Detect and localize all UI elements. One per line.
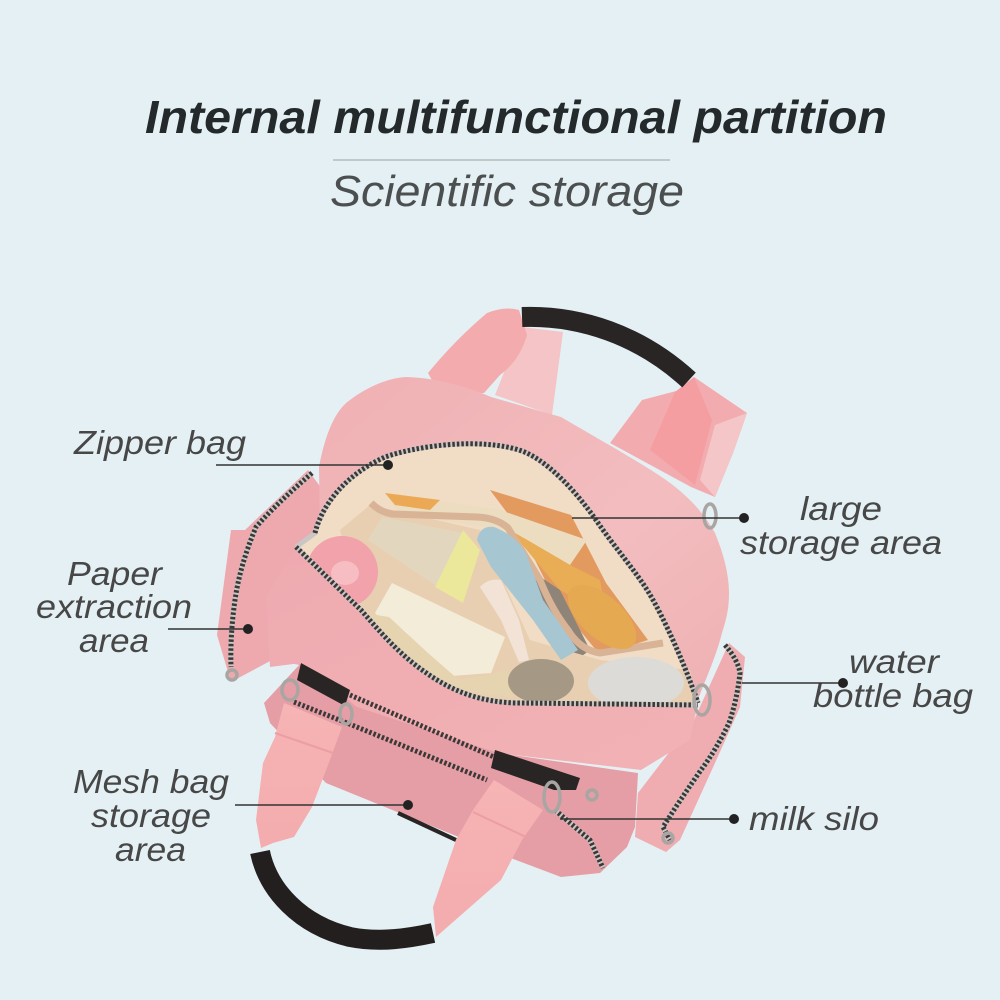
wipes pack bbox=[375, 583, 505, 677]
callout: milk silo bbox=[560, 800, 879, 837]
baby wipes roll bbox=[588, 657, 684, 709]
callout: water bottle bag bbox=[742, 643, 974, 714]
right side pocket bbox=[635, 643, 745, 852]
lower pocket bbox=[264, 663, 638, 877]
callout: milk silo: milk silo bbox=[749, 800, 879, 837]
callout: Paper extraction area bbox=[36, 555, 253, 659]
small white roll bbox=[376, 626, 410, 654]
callout: Mesh bag storage area: Mesh bag bbox=[73, 763, 230, 800]
interior floor bbox=[340, 505, 698, 703]
white spoon bbox=[480, 580, 529, 662]
yellow soap box bbox=[557, 573, 647, 661]
callout: Mesh bag storage area bbox=[73, 763, 413, 868]
back straps bbox=[428, 309, 747, 497]
card bbox=[385, 493, 587, 565]
orange shadow pocket bbox=[490, 490, 648, 655]
callout: Paper extraction area: extraction bbox=[36, 588, 192, 625]
bottom black handle bbox=[260, 852, 433, 940]
baby bottle bbox=[368, 517, 463, 587]
panel: bag interior lining bbox=[296, 444, 698, 703]
callout: Zipper bag bbox=[73, 424, 393, 470]
lid of bag bbox=[319, 377, 729, 710]
callout: large storage area: large bbox=[800, 490, 882, 527]
front zipper bbox=[296, 547, 698, 705]
title: Internal multifunctional partition bbox=[145, 91, 887, 143]
callout: Zipper bag: Zipper bag bbox=[73, 424, 247, 461]
callout: Paper extraction area: area bbox=[79, 622, 149, 659]
black binding and mesh zippers bbox=[294, 663, 603, 868]
bottle cap bbox=[435, 530, 480, 603]
illustration: open pink backpack bbox=[217, 309, 747, 940]
main zipper bbox=[296, 444, 698, 703]
callout: large storage area: storage area bbox=[740, 524, 942, 561]
front body bbox=[266, 547, 698, 770]
blue spoon bbox=[477, 527, 578, 660]
pouch front bbox=[364, 613, 512, 697]
glasses bbox=[508, 659, 574, 703]
callout: large storage area bbox=[572, 490, 942, 561]
left side pocket bbox=[217, 470, 330, 682]
subtitle: Scientific storage bbox=[330, 167, 684, 216]
metal rings and zipper pulls bbox=[227, 504, 716, 843]
dark compartment bbox=[530, 570, 590, 665]
pouch fold bbox=[371, 503, 663, 653]
pink ball bbox=[306, 536, 378, 608]
top black handle bbox=[522, 317, 689, 380]
callout: Mesh bag storage area: area bbox=[115, 831, 186, 868]
front handle straps bbox=[256, 703, 543, 937]
callout: Mesh bag storage area: storage bbox=[91, 797, 211, 834]
callout: water bottle bag: water bbox=[849, 643, 941, 680]
items inside bag bbox=[306, 490, 698, 709]
callout: Paper extraction area: Paper bbox=[67, 555, 164, 592]
callout: water bottle bag: bottle bag bbox=[813, 677, 974, 714]
